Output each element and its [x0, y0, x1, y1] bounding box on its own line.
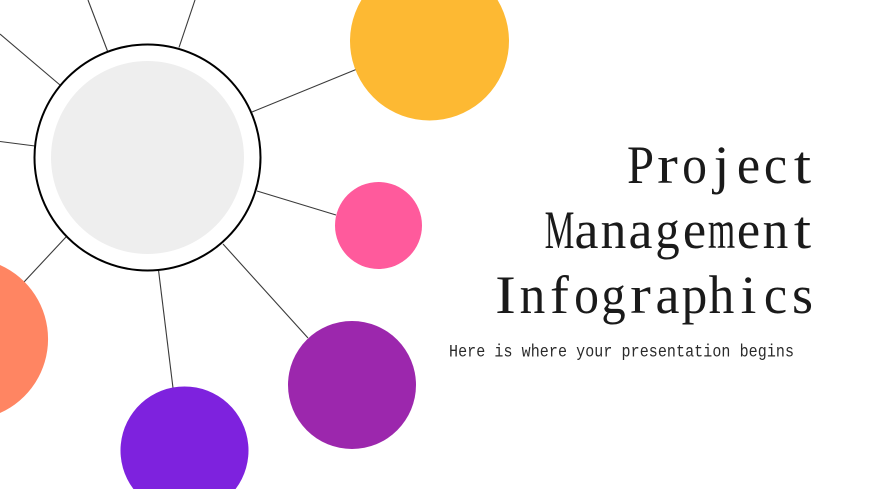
- title: c: [764, 265, 787, 325]
- hub circle: [34, 44, 260, 270]
- title: p: [682, 265, 707, 325]
- title: o: [574, 265, 599, 325]
- node: pink circle: [335, 182, 422, 269]
- title: e: [737, 135, 760, 195]
- title: [495, 135, 813, 325]
- subtitle: Here is where your presentation begins: [449, 343, 794, 362]
- title: e: [737, 200, 760, 260]
- node: magenta purple circle: [288, 321, 416, 449]
- title: f: [550, 265, 569, 325]
- node: yellow circle: [350, 0, 509, 121]
- title: n: [601, 200, 626, 260]
- title: n: [763, 200, 788, 260]
- connector lines: [0, 0, 356, 388]
- title: t: [794, 200, 811, 260]
- title: M: [545, 200, 574, 260]
- title: g: [655, 200, 680, 260]
- title: n: [520, 265, 545, 325]
- node: coral circle: [0, 265, 48, 413]
- title: g: [601, 265, 626, 325]
- title: i: [741, 265, 756, 325]
- title: m: [708, 200, 735, 260]
- title: s: [792, 265, 813, 325]
- title: j: [714, 135, 729, 195]
- title: a: [656, 265, 679, 325]
- title: r: [630, 265, 651, 325]
- node: violet circle: [120, 386, 248, 489]
- title: I: [495, 265, 516, 325]
- title: P: [627, 135, 654, 195]
- title: r: [657, 135, 678, 195]
- title: a: [575, 200, 598, 260]
- title: a: [629, 200, 652, 260]
- title: h: [709, 265, 734, 325]
- title: e: [683, 200, 706, 260]
- title: t: [794, 135, 811, 195]
- title: c: [764, 135, 787, 195]
- title: o: [682, 135, 707, 195]
